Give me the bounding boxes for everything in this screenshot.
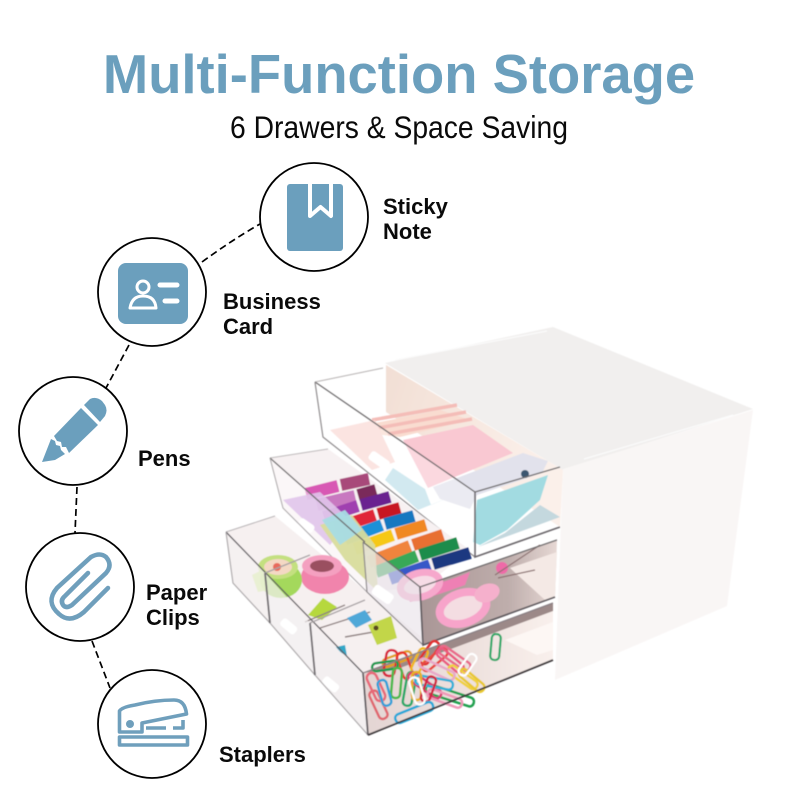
label: pens: Pens bbox=[138, 446, 191, 471]
label: staplers: Staplers bbox=[219, 742, 306, 767]
dashed connector path bbox=[75, 224, 260, 688]
subtitle: 6 Drawers & Space Saving bbox=[230, 109, 568, 145]
icon: bookmark note bbox=[287, 184, 343, 251]
label: sticky note: Sticky bbox=[383, 194, 449, 219]
middle left drawer shell bbox=[270, 449, 378, 592]
item: sticky note bbox=[260, 163, 449, 271]
label: paper clips: Clips bbox=[146, 605, 200, 630]
title: Multi-Function Storage bbox=[103, 44, 695, 105]
label: business card: Card bbox=[223, 314, 273, 339]
washi tapes bbox=[258, 555, 349, 598]
binder clips bbox=[305, 598, 397, 656]
top drawer contents bbox=[330, 405, 560, 547]
product photo: six-drawer storage box bbox=[226, 327, 753, 735]
label: business card bbox=[223, 289, 321, 339]
icon: pencil bbox=[42, 398, 106, 462]
label: sticky note bbox=[383, 194, 449, 244]
item: pens bbox=[19, 377, 191, 485]
item: paper clips bbox=[26, 533, 208, 641]
middle right cavity bbox=[420, 540, 557, 645]
bottom right cavity bbox=[363, 603, 553, 735]
label: paper clips bbox=[146, 580, 208, 630]
box top face bbox=[385, 327, 753, 470]
icon: stapler bbox=[120, 700, 188, 745]
top cavity bbox=[386, 365, 563, 527]
label: paper clips: Paper bbox=[146, 580, 208, 605]
middle left drawer pens bbox=[270, 449, 470, 592]
item: business card bbox=[98, 238, 321, 346]
middle right drawer with scissors bbox=[363, 540, 557, 645]
label: sticky note: Note bbox=[383, 219, 432, 244]
icon: paper clip bbox=[51, 554, 110, 619]
top drawer clear shell bbox=[315, 368, 560, 557]
paper clips pile bbox=[365, 634, 501, 724]
item: staplers bbox=[98, 670, 306, 778]
bottom row drawers clear shell bbox=[226, 516, 553, 735]
box right face bbox=[555, 410, 753, 680]
bottom row floor bbox=[226, 516, 425, 735]
icon: id card bbox=[118, 263, 188, 324]
label: business card: Business bbox=[223, 289, 321, 314]
